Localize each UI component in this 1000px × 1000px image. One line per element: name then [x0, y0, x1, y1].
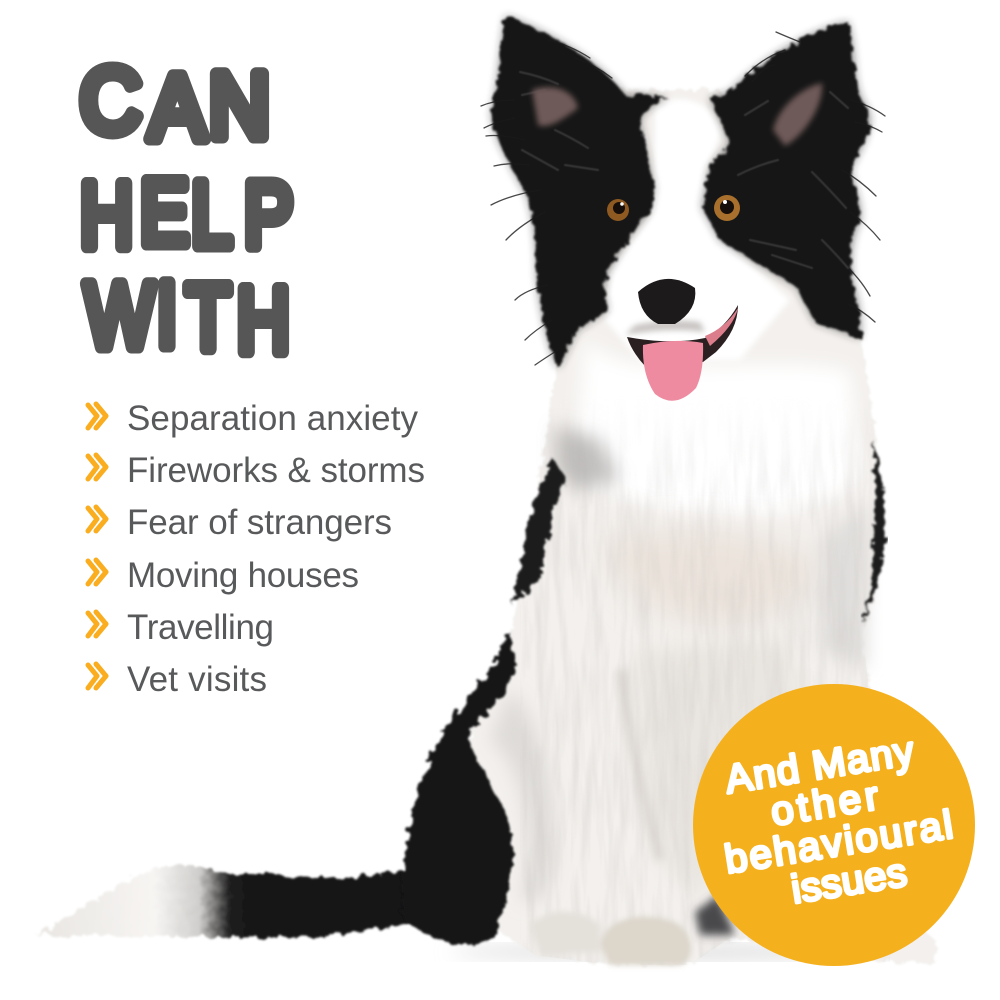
beige chest shade	[600, 530, 825, 626]
head black left	[492, 16, 668, 368]
black right side patch	[863, 440, 885, 625]
title: CAN	[80, 49, 270, 159]
title: WITH	[85, 263, 290, 372]
dark gap beside paw	[695, 895, 735, 935]
eye left	[607, 199, 629, 221]
list: behaviours	[88, 399, 425, 699]
list item: vet visits: Vet visits	[127, 660, 267, 699]
bright chest fur	[575, 340, 860, 516]
mouth	[627, 305, 738, 366]
tail	[36, 864, 430, 937]
list item: moving houses: Moving houses	[127, 556, 359, 595]
ear inner right	[773, 83, 822, 146]
callout: many other issues: issues	[788, 851, 910, 912]
list item: fear of strangers: Fear of strangers	[127, 503, 392, 542]
callout: many other issues: And Many	[722, 729, 917, 802]
black back patch	[512, 458, 566, 605]
callout: many other issues	[693, 684, 975, 966]
callout: many other issues: behavioural	[722, 803, 956, 882]
list item: separation anxiety: Separation anxiety	[127, 399, 418, 438]
front paw	[600, 917, 691, 965]
belly fur shade	[635, 640, 800, 900]
white blaze	[605, 99, 790, 360]
callout: many other issues: other	[768, 774, 881, 834]
body white	[469, 90, 935, 965]
tongue	[643, 341, 703, 401]
muzzle shading	[625, 321, 705, 335]
fur halo	[492, 16, 870, 368]
grey neck flecks	[556, 425, 620, 490]
fur strands	[481, 32, 885, 365]
list item: fireworks and storms: Fireworks & storms	[127, 451, 425, 490]
ground shadow	[450, 946, 870, 958]
nose	[638, 279, 695, 324]
title: HELP	[80, 161, 293, 267]
ear inner left	[532, 87, 578, 126]
grey streaks in black fur	[520, 72, 848, 268]
list item: travelling: Travelling	[127, 608, 274, 647]
title	[80, 49, 293, 372]
left foreleg shadow	[622, 670, 660, 860]
fur texture	[528, 446, 874, 965]
black haunch	[401, 632, 516, 944]
head black right	[702, 22, 870, 338]
left hind paw	[530, 912, 600, 955]
thigh grey fur	[490, 690, 555, 900]
right flank grey	[820, 500, 868, 670]
eye right	[714, 195, 740, 221]
